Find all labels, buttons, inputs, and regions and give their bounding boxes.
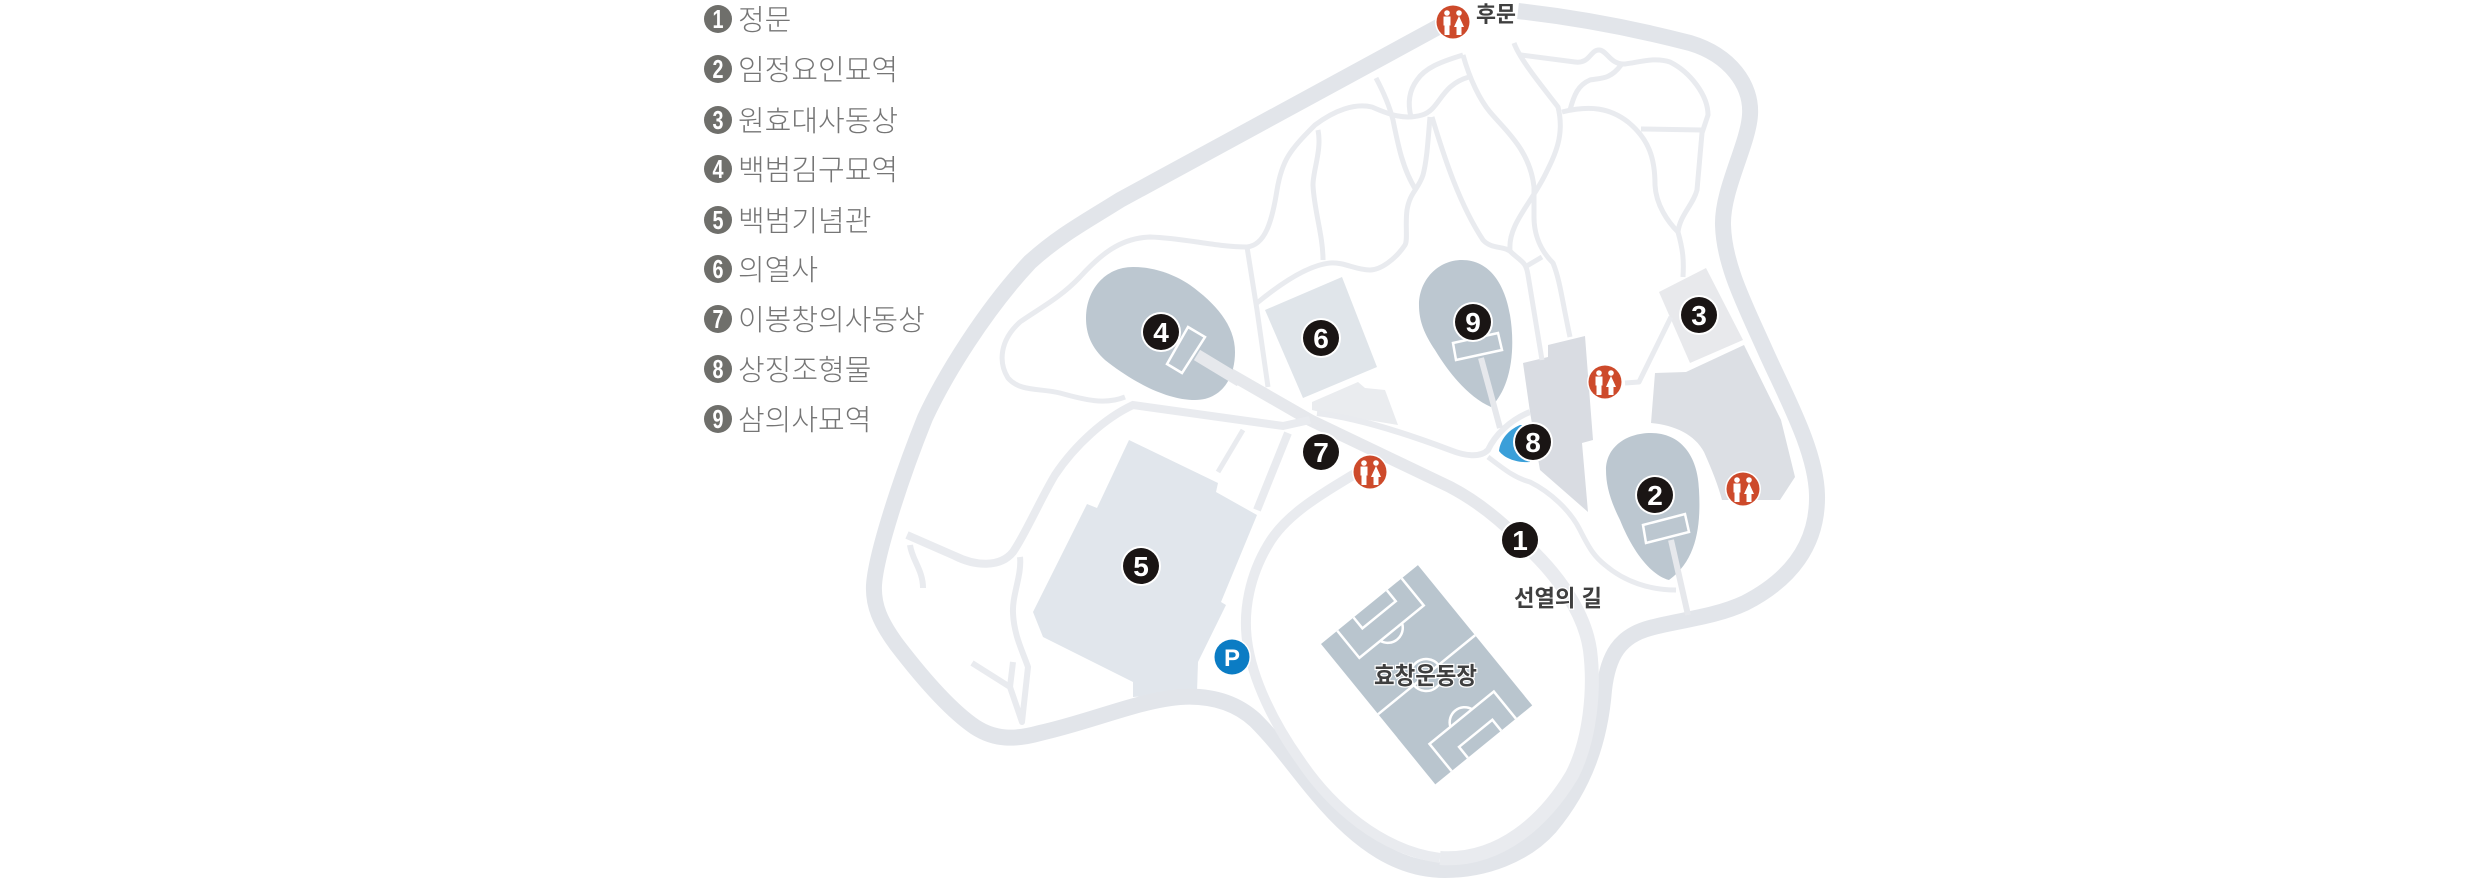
legend item 7: 7 — [712, 304, 724, 334]
marker 2 — [1635, 475, 1675, 515]
icon: restroom near 7 — [1352, 454, 1388, 490]
icon: restroom back gate — [1435, 4, 1471, 40]
legend item 2: 2 — [712, 54, 724, 84]
footpaths — [910, 43, 1708, 722]
label: back gate: 후문 — [1476, 2, 1516, 27]
legend item 1: 1 — [712, 4, 724, 34]
label: stadium: 효창운동장 — [1374, 663, 1477, 690]
legend list — [704, 4, 925, 437]
marker 6: 6 — [1313, 323, 1329, 354]
legend item 7: 이봉창의사동상 — [738, 305, 925, 337]
marker 1: 1 — [1512, 525, 1528, 556]
icon: restroom east — [1725, 471, 1761, 507]
legend item 3: 3 — [712, 105, 724, 135]
marker 8 — [1513, 422, 1553, 462]
marker 3 — [1679, 295, 1719, 335]
tomb area 2 — [1606, 433, 1699, 615]
label: path of martyrs: 선열의 길 — [1514, 585, 1602, 611]
legend item 6: 6 — [712, 254, 724, 284]
marker 2: 2 — [1647, 480, 1663, 511]
icon: water feature — [1499, 425, 1530, 462]
stadium ring road — [1246, 472, 1592, 858]
legend item 5: 백범기념관 — [738, 206, 871, 238]
marker 4 — [1141, 312, 1181, 352]
legend item 4: 백범김구묘역 — [738, 155, 898, 187]
icon: restroom center — [1587, 364, 1623, 400]
marker 4: 4 — [1153, 317, 1169, 348]
building: 5 memorial hall — [1033, 440, 1257, 697]
legend item 5: 5 — [712, 205, 724, 235]
icon: parking: P — [1224, 645, 1240, 672]
marker 8: 8 — [1525, 427, 1541, 458]
icon: parking — [1213, 638, 1251, 676]
marker 5 — [1121, 546, 1161, 586]
marker 5: 5 — [1133, 551, 1149, 582]
marker 3: 3 — [1691, 300, 1707, 331]
legend item 8: 상징조형물 — [738, 355, 871, 387]
legend item 6: 의열사 — [738, 255, 818, 287]
building: 6 uiyeolsa — [1265, 277, 1377, 398]
building: 8 symbol area — [1523, 336, 1593, 512]
inner west road — [907, 405, 1310, 564]
park outer road — [874, 11, 1817, 870]
tomb area 4 — [1086, 267, 1240, 400]
legend item 1: 정문 — [738, 5, 791, 37]
marker 9: 9 — [1465, 307, 1481, 338]
legend item 6 — [704, 254, 818, 287]
building: 6 forecourt — [1312, 382, 1398, 425]
building: 3 statue plaza — [1659, 268, 1743, 363]
marker 1 — [1500, 520, 1540, 560]
legend item 1 — [704, 4, 791, 37]
legend item 4: 4 — [712, 154, 724, 184]
marker 6 — [1301, 318, 1341, 358]
legend item 9: 9 — [712, 404, 724, 434]
marker 7 — [1301, 432, 1341, 472]
legend item 2: 임정요인묘역 — [738, 55, 898, 87]
legend item 3: 원효대사동상 — [738, 106, 898, 138]
tomb area 9 — [1419, 260, 1512, 428]
marker 9 — [1453, 302, 1493, 342]
legend item 8: 8 — [712, 354, 724, 384]
legend item 9: 삼의사묘역 — [738, 405, 871, 437]
building: right side area — [1651, 345, 1795, 500]
marker 7: 7 — [1313, 437, 1329, 468]
soccer field — [1321, 565, 1532, 784]
memorial walkway — [1197, 355, 1520, 540]
